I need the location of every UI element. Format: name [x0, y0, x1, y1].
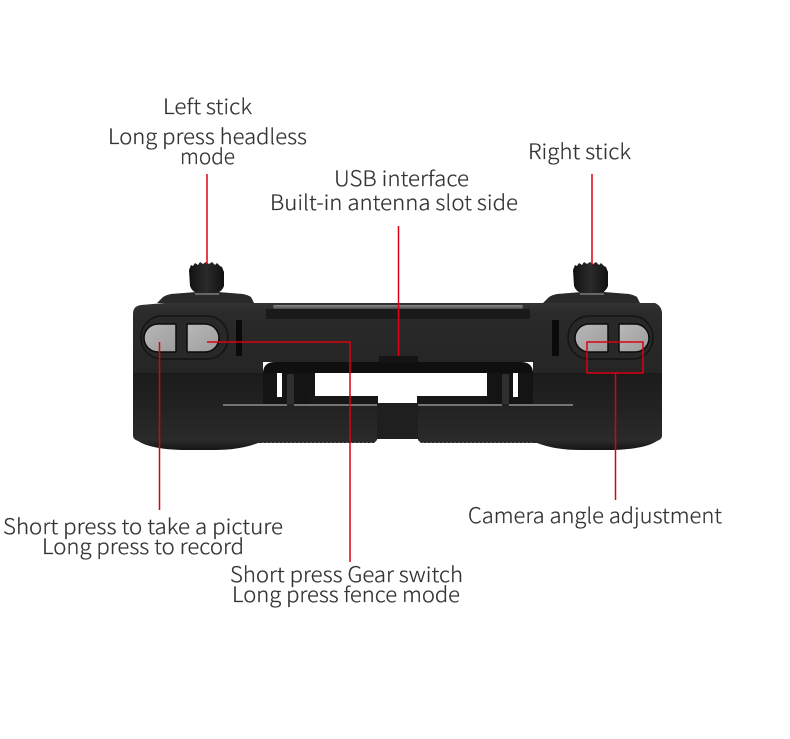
label: usb interface: USB interface [334, 163, 469, 193]
label: fence mode: Long press fence mode [232, 579, 460, 609]
button: camera down [619, 324, 649, 352]
label: camera angle: Camera angle adjustment [468, 500, 723, 530]
right button recess [568, 316, 653, 359]
callout lines [160, 174, 643, 562]
label: headless: Long press headless [108, 121, 307, 151]
button: camera up [575, 324, 608, 352]
grip teeth [262, 442, 533, 444]
icon: left stick [157, 262, 254, 303]
usb port [379, 356, 418, 362]
hinge area [263, 373, 533, 439]
top bar highlight [273, 305, 523, 309]
label: gear switch: Short press Gear switch [230, 559, 463, 589]
label: right stick: Right stick [528, 136, 631, 166]
label: record: Long press to record [42, 531, 244, 561]
label: mode: mode [180, 141, 235, 171]
upper body [133, 303, 662, 373]
button: gear [187, 324, 219, 352]
hinge highlights [223, 404, 573, 406]
left button recess [141, 316, 228, 359]
label: left stick: Left stick [163, 91, 252, 121]
icon: right stick [543, 262, 640, 303]
label: take a picture: Short press to take a picture [3, 511, 283, 541]
label: antenna slot: Built-in antenna slot side [270, 187, 518, 217]
lower grip left [133, 373, 377, 450]
button: photo [144, 324, 176, 352]
hinge band [263, 362, 533, 373]
lower grip right [418, 373, 662, 450]
controller [133, 262, 662, 450]
side slots [236, 320, 559, 356]
